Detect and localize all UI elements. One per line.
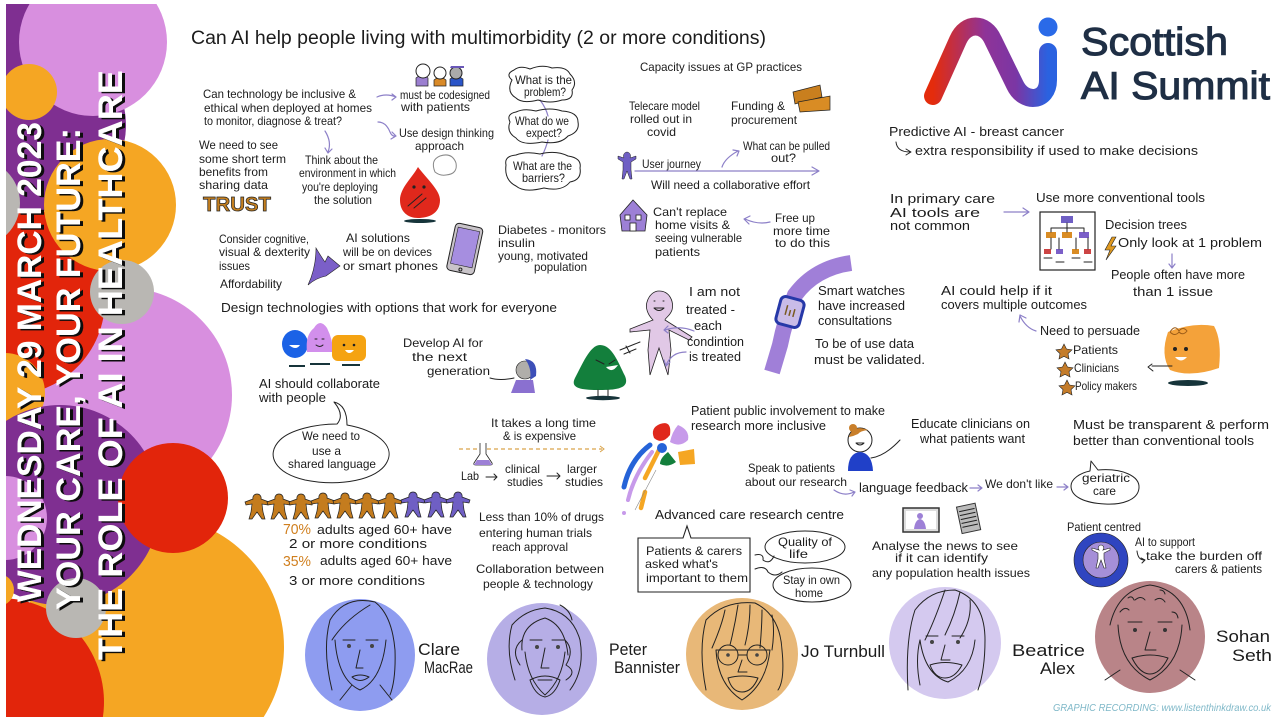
text: diabetes: insulin <box>498 236 535 250</box>
text: free up time: more time <box>773 224 830 238</box>
text: transparency <box>1073 417 1269 448</box>
text: environment: the solution <box>314 193 372 207</box>
user journey arrow: User journey <box>642 157 701 171</box>
text: need to persuade with stars: Patients <box>1073 343 1118 357</box>
speech bubble: geriatric care: care <box>1093 484 1116 498</box>
text: funding <box>731 99 798 127</box>
speech bubble: quality of life <box>755 531 845 563</box>
text: analyse the news: any population health issues <box>872 566 1030 580</box>
icon: newspaper <box>956 503 981 534</box>
diagram: drug development: Lab <box>461 469 479 483</box>
callout: patients and carers box: important to them <box>646 571 748 585</box>
text: cannot replace: patients <box>655 245 700 259</box>
text: need to persuade with stars: Need to persuade <box>1040 323 1140 338</box>
text: collaboration: Collaboration between <box>476 562 604 576</box>
text: predictive AI: extra responsibility if used to make decisions <box>915 143 1199 158</box>
clouds: three questions: What are the <box>513 159 572 173</box>
text: funding: Funding & <box>731 99 785 113</box>
logo: Scottish AI Summit: AI Summit <box>1081 65 1270 108</box>
text: decision trees: Only look at 1 problem <box>1118 235 1262 250</box>
clouds: three questions: What do we <box>515 114 569 128</box>
text: codesign: with patients <box>400 100 470 114</box>
text: educate clinicians: Educate clinicians on <box>911 416 1030 431</box>
text: I am not treated: condintion <box>687 334 744 349</box>
text: next generation: the next <box>412 350 468 364</box>
speech bubble: stay in own home <box>755 568 851 602</box>
text: smart watches: have increased <box>818 298 905 313</box>
portrait: Clare MacRae <box>305 599 415 711</box>
text: I am not treated: each <box>694 318 722 333</box>
text: collaboration: people & technology <box>483 577 593 591</box>
text: speak to patients: Speak to patients <box>748 461 835 475</box>
text: cannot replace: Can't replace <box>653 205 727 219</box>
text: decision trees: than 1 issue <box>1133 284 1213 299</box>
characters: AI trio <box>282 323 366 366</box>
text: educate clinicians: what patients want <box>919 431 1025 446</box>
text: primary care <box>890 191 1029 233</box>
flow: language feedback: language feedback <box>859 480 968 495</box>
text: decision trees <box>1105 217 1262 299</box>
character: pink person <box>630 291 694 375</box>
banner title: date and event name: THE ROLE OF AI IN HEALTHCARE <box>92 70 130 660</box>
text: AI to support: take the burden off <box>1146 549 1263 563</box>
diagram: drug development: clinical <box>505 462 540 476</box>
text: AI to support: AI to support <box>1135 535 1196 549</box>
text: telecare <box>629 99 700 139</box>
text: analyse the news: Analyse the news to see <box>872 539 1018 553</box>
text: predictive AI <box>889 124 1199 158</box>
text: analyse the news <box>872 539 1030 580</box>
icon: smart watch <box>772 263 851 372</box>
speech bubble: quality of life: life <box>789 547 808 561</box>
text: cognitive issues <box>219 232 310 291</box>
text: short term benefits: We need to see <box>199 138 278 152</box>
text: cognitive issues: issues <box>219 259 250 273</box>
flow: language feedback: We don't like <box>985 477 1053 491</box>
text: telecare: covid <box>647 125 676 139</box>
text: AI should collaborate <box>258 376 380 405</box>
text: cannot replace: home visits & <box>655 218 730 232</box>
text: cognitive issues: visual & dexterity <box>219 245 310 259</box>
character: young person in headscarf <box>490 359 536 393</box>
speech bubble: stay in own home: home <box>795 586 823 600</box>
text: what can be pulled out: out? <box>771 151 796 165</box>
text: diabetes: population <box>534 260 587 274</box>
text: free up time: to do this <box>775 236 830 250</box>
text: AI could help: AI could help if it <box>941 283 1052 298</box>
text: what can be pulled out <box>743 139 830 165</box>
diagram: drug development: studies <box>507 475 543 489</box>
icon: smartphone <box>446 223 483 275</box>
text: need to persuade with stars <box>1040 323 1140 395</box>
speech bubble: shared language <box>273 402 389 483</box>
stats: multimorbidity percentages <box>283 521 452 588</box>
text: smart watches <box>814 283 925 367</box>
text: inclusive technology question <box>203 87 372 128</box>
text: free up time: Free up <box>775 211 815 225</box>
text: conventional tools: Use more conventional tools <box>1036 190 1206 205</box>
logo: Scottish AI Summit <box>933 18 1270 108</box>
text: AI could help: covers multiple outcomes <box>941 297 1087 312</box>
text: transparency: Must be transparent & perform <box>1073 417 1269 432</box>
diagram: drug development: larger <box>567 462 597 476</box>
text: I am not treated <box>686 284 744 364</box>
logo: Scottish AI Summit: Scottish <box>1081 21 1228 64</box>
text: AI to support <box>1135 535 1263 576</box>
text: cannot replace: seeing vulnerable <box>655 231 742 245</box>
text: next generation <box>403 336 490 378</box>
text: AI to support: carers & patients <box>1175 562 1262 576</box>
speech bubble: shared language: shared language <box>288 457 376 471</box>
text: cognitive issues: Consider cognitive, <box>219 232 309 246</box>
pictogram: ten people, seven highlighted <box>245 492 470 519</box>
text: AI should collaborate: AI should collaborate <box>259 376 380 391</box>
text: next generation: generation <box>427 364 490 378</box>
text: smart watches: consultations <box>818 313 892 328</box>
text: inclusive technology question: ethical when deployed at homes <box>204 101 372 115</box>
text: environment: Think about the <box>305 153 378 167</box>
name: Beatrice Alex: Alex <box>1040 659 1076 678</box>
credit: graphic recording: GRAPHIC RECORDING: www.listenthinkdraw.co.uk <box>1053 703 1272 714</box>
character: green pointing <box>574 342 640 400</box>
text: design thinking: approach <box>415 139 464 153</box>
name: Beatrice Alex: Beatrice <box>1012 641 1085 660</box>
name: Clare MacRae: Clare <box>418 640 460 659</box>
text: AI solutions: AI solutions <box>346 231 410 245</box>
text: short term benefits <box>199 138 286 192</box>
text: smart watches: must be validated. <box>814 352 925 367</box>
text: less than 10 percent: reach approval <box>492 540 568 554</box>
icon: house <box>620 200 647 231</box>
text: patient public involvement <box>691 403 885 433</box>
text: transparency: better than conventional tools <box>1073 433 1255 448</box>
text: cannot replace <box>653 205 742 259</box>
character: orange pointing <box>1148 325 1220 386</box>
text: primary care: not common <box>890 218 970 233</box>
text: AI could help <box>941 283 1087 331</box>
arrows from question <box>325 94 396 153</box>
portrait: Jo Turnbull <box>686 598 798 710</box>
name: Jo Turnbull: Jo Turnbull <box>801 642 885 661</box>
icon: decision tree <box>1040 212 1095 270</box>
diagram: drug development <box>459 416 604 489</box>
text: patient centred: Patient centred <box>1067 520 1141 534</box>
banner title: date and event name: YOUR CARE, YOUR FUTURE: <box>50 128 88 610</box>
stats: multimorbidity percentages: 2 or more conditions <box>289 536 428 551</box>
text: inclusive technology question: to monitor, diagnose & treat? <box>204 114 342 128</box>
heading: design for everyone: Design technologies with options that work for everyone <box>221 300 557 315</box>
panel: decorative circles banner <box>0 0 284 717</box>
text: diabetes <box>498 223 606 274</box>
stats: multimorbidity percentages: 3 or more conditions <box>289 573 426 588</box>
text: collaborative effort: Will need a collaborative effort <box>651 178 811 192</box>
text: short term benefits: some short term <box>199 152 286 166</box>
text: I am not treated: I am not <box>689 284 740 299</box>
text: decision trees: People often have more <box>1111 267 1245 282</box>
text: primary care: In primary care <box>890 191 995 206</box>
text: speak to patients <box>745 461 855 496</box>
icon: purple arrow <box>308 248 340 285</box>
name: Beatrice Alex <box>1012 641 1085 678</box>
title: Can AI help people living with multimorbidity (2 or more conditions) <box>191 28 766 49</box>
speech bubble: geriatric care: geriatric <box>1082 471 1130 485</box>
name: Sohan Seth: Sohan <box>1216 627 1270 646</box>
callout: patients and carers box <box>638 526 750 592</box>
speech bubble: shared language: We need to <box>302 429 360 443</box>
text: short term benefits: benefits from <box>199 165 268 179</box>
text: telecare: Telecare model <box>629 99 700 113</box>
name: Peter Bannister: Bannister <box>614 658 680 677</box>
text: free up time <box>744 211 830 250</box>
speech bubble: quality of life: Quality of <box>778 535 833 549</box>
text: collaboration <box>476 562 604 591</box>
text: need to persuade with stars: Clinicians <box>1074 361 1119 375</box>
icon: rainbow of characters <box>622 423 695 515</box>
heading: advanced care research centre: Advanced care research centre <box>655 507 844 522</box>
callout: patients and carers box: Patients & carers <box>646 544 742 558</box>
icon: money <box>793 85 830 112</box>
text: I am not treated: is treated <box>689 349 741 364</box>
text: analyse the news: if it can identify <box>895 551 988 565</box>
icon: three patients <box>416 64 464 86</box>
text: cognitive issues: Affordability <box>220 277 282 291</box>
clouds: three questions: problem? <box>524 85 566 99</box>
text: I am not treated: treated - <box>686 302 735 317</box>
portrait: Sohan Seth <box>1095 581 1205 693</box>
stats: multimorbidity percentages: 70% <box>283 521 311 538</box>
text: predictive AI: Predictive AI - breast cancer <box>889 124 1065 139</box>
text: need to persuade with stars: Policy makers <box>1075 379 1137 393</box>
text: design thinking: Use design thinking <box>399 126 494 140</box>
text: codesign <box>400 88 490 114</box>
text: next generation: Develop AI for <box>403 336 483 350</box>
speech bubble: geriatric care <box>1071 461 1139 504</box>
text: primary care: AI tools are <box>890 205 980 220</box>
speech bubble: stay in own home: Stay in own <box>783 573 840 587</box>
text: decision trees: Decision trees <box>1105 217 1187 232</box>
text: what can be pulled out: What can be pulled <box>743 139 830 153</box>
text: AI solutions: or smart phones <box>343 259 438 273</box>
text: AI solutions <box>342 231 438 273</box>
text: patient public involvement: Patient public involvement to make <box>691 403 885 418</box>
text: environment: you're deploying <box>302 180 378 194</box>
text: smart watches: To be of use data <box>815 336 915 351</box>
clouds: three questions: expect? <box>526 126 562 140</box>
name: Sohan Seth <box>1216 627 1272 665</box>
icon: television news <box>903 508 939 532</box>
text: telecare: rolled out in <box>630 112 692 126</box>
user journey arrow <box>635 150 819 175</box>
flow: language feedback <box>859 477 1068 495</box>
text: less than 10 percent <box>479 510 604 554</box>
speech bubble: shared language: use a <box>312 444 341 458</box>
diagram: drug development: & is expensive <box>503 429 576 443</box>
stats: multimorbidity percentages: 35% <box>283 553 311 570</box>
clouds: three questions <box>506 66 580 190</box>
text: short term benefits: sharing data <box>199 178 268 192</box>
text: AI solutions: will be on devices <box>342 245 432 259</box>
text: environment: environment in which <box>299 166 396 180</box>
TRUST word: TRUST <box>203 194 271 216</box>
text: educate clinicians <box>911 416 1030 446</box>
stats: multimorbidity percentages: adults aged 60+ have <box>317 522 452 537</box>
text: smart watches: Smart watches <box>818 283 905 298</box>
character: clinician educator <box>848 424 900 471</box>
banner title: date and event name <box>11 70 130 660</box>
clouds: three questions: What is the <box>515 73 572 87</box>
clouds: three questions: barriers? <box>522 171 565 185</box>
text: less than 10 percent: entering human trials <box>479 526 592 540</box>
banner title: date and event name: WEDNESDAY 29 MARCH 2023 <box>11 122 49 602</box>
portrait: Peter Bannister <box>487 603 597 715</box>
text: patient public involvement: research more inclusive <box>691 418 826 433</box>
text: less than 10 percent: Less than 10% of drugs <box>479 510 604 524</box>
callout: patients and carers box: asked what's <box>645 557 718 571</box>
text: design thinking <box>399 126 494 153</box>
stats: multimorbidity percentages: adults aged 60+ have <box>320 553 452 568</box>
text: funding: procurement <box>731 113 798 127</box>
diagram: drug development: studies <box>565 475 603 489</box>
portrait: Beatrice Alex <box>889 587 1001 699</box>
text: environment <box>299 153 396 207</box>
text: diabetes: young, motivated <box>498 249 588 263</box>
name: Sohan Seth: Seth <box>1232 646 1272 665</box>
character: red thinking drop <box>400 155 456 223</box>
icon: person on user journey <box>618 152 636 179</box>
text: inclusive technology question: Can technology be inclusive & <box>203 87 356 101</box>
diagram: drug development: It takes a long time <box>491 416 596 430</box>
icon: patient centred badge <box>1074 533 1128 587</box>
name: Clare MacRae: MacRae <box>424 658 473 677</box>
name: Peter Bannister: Peter <box>609 640 647 659</box>
text: capacity issues: Capacity issues at GP practices <box>640 60 802 74</box>
name: Peter Bannister <box>609 640 680 677</box>
text: AI should collaborate: with people <box>258 390 326 405</box>
text: speak to patients: about our research <box>745 475 847 489</box>
text: codesign: must be codesigned <box>400 88 490 102</box>
text: diabetes: Diabetes - monitors <box>498 223 606 237</box>
name: Clare MacRae <box>418 640 473 677</box>
